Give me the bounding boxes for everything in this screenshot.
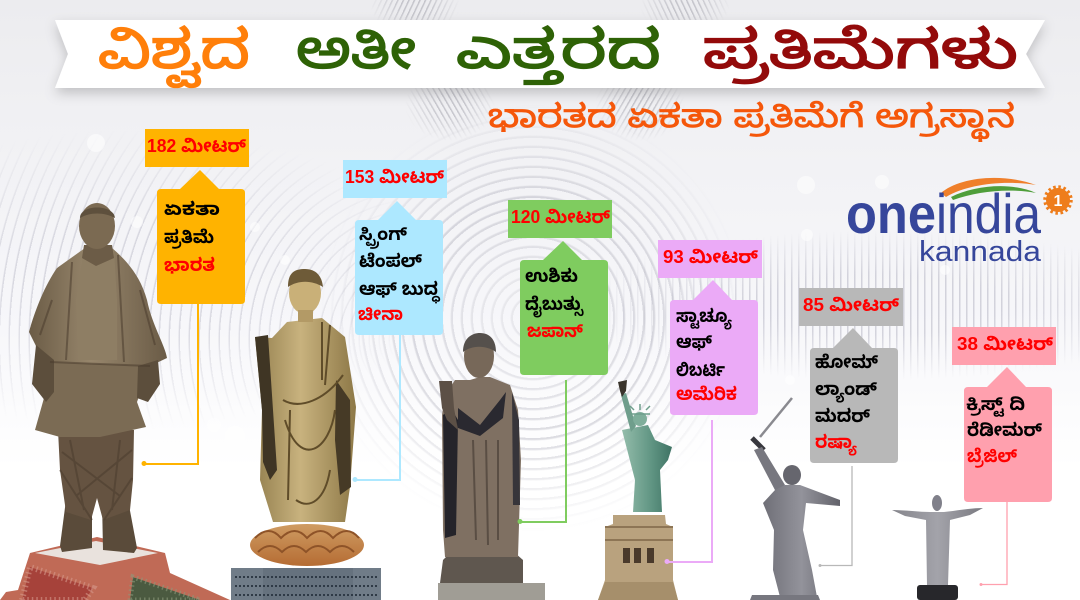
logo: oneindia kannada: kannada [919,236,1042,268]
callout: Ushiku Daibutsu [508,200,612,524]
name box: ಬ್ರೆಜಿಲ್ [967,446,1018,468]
height tag: 38 ಮೀಟರ್ [957,334,1054,354]
logo badge [1045,187,1071,213]
name box [810,328,898,463]
title word: world's: ವಿಶ್ವದ [98,21,250,88]
statue: Statue of Liberty [598,380,678,600]
name box: ದೈಬುತ್ಸು [525,294,584,318]
callout: Spring Temple Buddha [343,160,447,482]
height tag: 93 ಮೀಟರ್ [663,247,759,267]
name box: ಕ್ರಿಸ್ಟ್ ದಿ [966,394,1025,417]
name box: ಲ್ಯಾಂಡ್ [815,379,877,403]
statue: Ushiku Daibutsu [438,333,545,600]
callout: Christ the Redeemer [952,327,1056,586]
name box: ಉಶಿಕು [525,266,578,286]
name box: ಮದರ್ [815,406,871,426]
leader line [518,380,566,524]
name box: ಏಕತಾ [164,199,220,219]
name box [355,201,443,335]
title word: statues: ಪ್ರತಿಮೆಗಳು [703,21,1018,84]
logo swoosh [941,178,1036,200]
name box: ಆಫ್ ಬುದ್ಧ [359,279,441,304]
callout: The Motherland Calls [799,288,903,567]
height tag: 153 ಮೀಟರ್ [345,167,445,187]
title word: tallest: ಅತೀ [296,21,416,80]
height tag [658,240,762,278]
name box: ಜಪಾನ್ [527,321,584,341]
height tag: 182 ಮೀಟರ್ [147,136,247,156]
title word: high: ಎತ್ತರದ [456,21,661,85]
name box: ರಷ್ಯಾ [815,432,857,456]
name box: ಲಿಬರ್ಟಿ [676,360,725,380]
logo badge: 1 [1054,193,1063,210]
leader line [818,466,852,567]
height tag [343,160,447,198]
leader line [142,304,198,466]
statue: The Motherland Calls [750,398,840,600]
name box [670,280,758,415]
name box: ಚೀನಾ [358,304,403,324]
name box: ಪ್ರತಿಮೆ [164,227,214,249]
name box: ಭಾರತ [164,255,215,275]
height tag [799,288,903,326]
callout: Statue of Unity [142,129,249,466]
name box: ರೆಡೀಮರ್ [967,420,1043,440]
logo wordmark: one [846,182,936,245]
name box: ಅಮೆರಿಕ [676,384,737,404]
leader line [664,420,712,564]
name box: ಆಫ್ [676,332,713,352]
name box [964,367,1052,502]
name box: ಟೆಂಪಲ್ [359,251,423,271]
logo: oneindia kannada: india [936,182,1042,245]
height tag: 85 ಮೀಟರ್ [803,295,900,315]
height tag: 120 ಮೀಟರ್ [511,207,611,227]
name box [520,241,608,375]
height tag [952,327,1056,365]
title banner [55,20,1045,88]
height tag [508,200,612,238]
subtitle: ಭಾರತದ ಏಕತಾ ಪ್ರತಿಮೆಗೆ ಅಗ್ರಸ್ಥಾನ [488,98,1015,142]
callout: Statue of Liberty [658,240,762,564]
statue: Christ the Redeemer [892,495,983,600]
name box: ಹೋಮ್ [815,352,878,372]
height tag [145,129,249,167]
name box: ಸ್ಪ್ರಿಂಗ್ [359,224,408,249]
statue: Spring Temple Buddha [231,269,381,600]
statue: Statue of Unity [0,203,230,600]
leader line [980,502,1007,586]
name box [157,170,245,304]
name box: ಸ್ಟಾಚ್ಯೂ [676,306,732,330]
logo: oneindia kannada [846,178,1071,268]
leader line [352,335,400,482]
